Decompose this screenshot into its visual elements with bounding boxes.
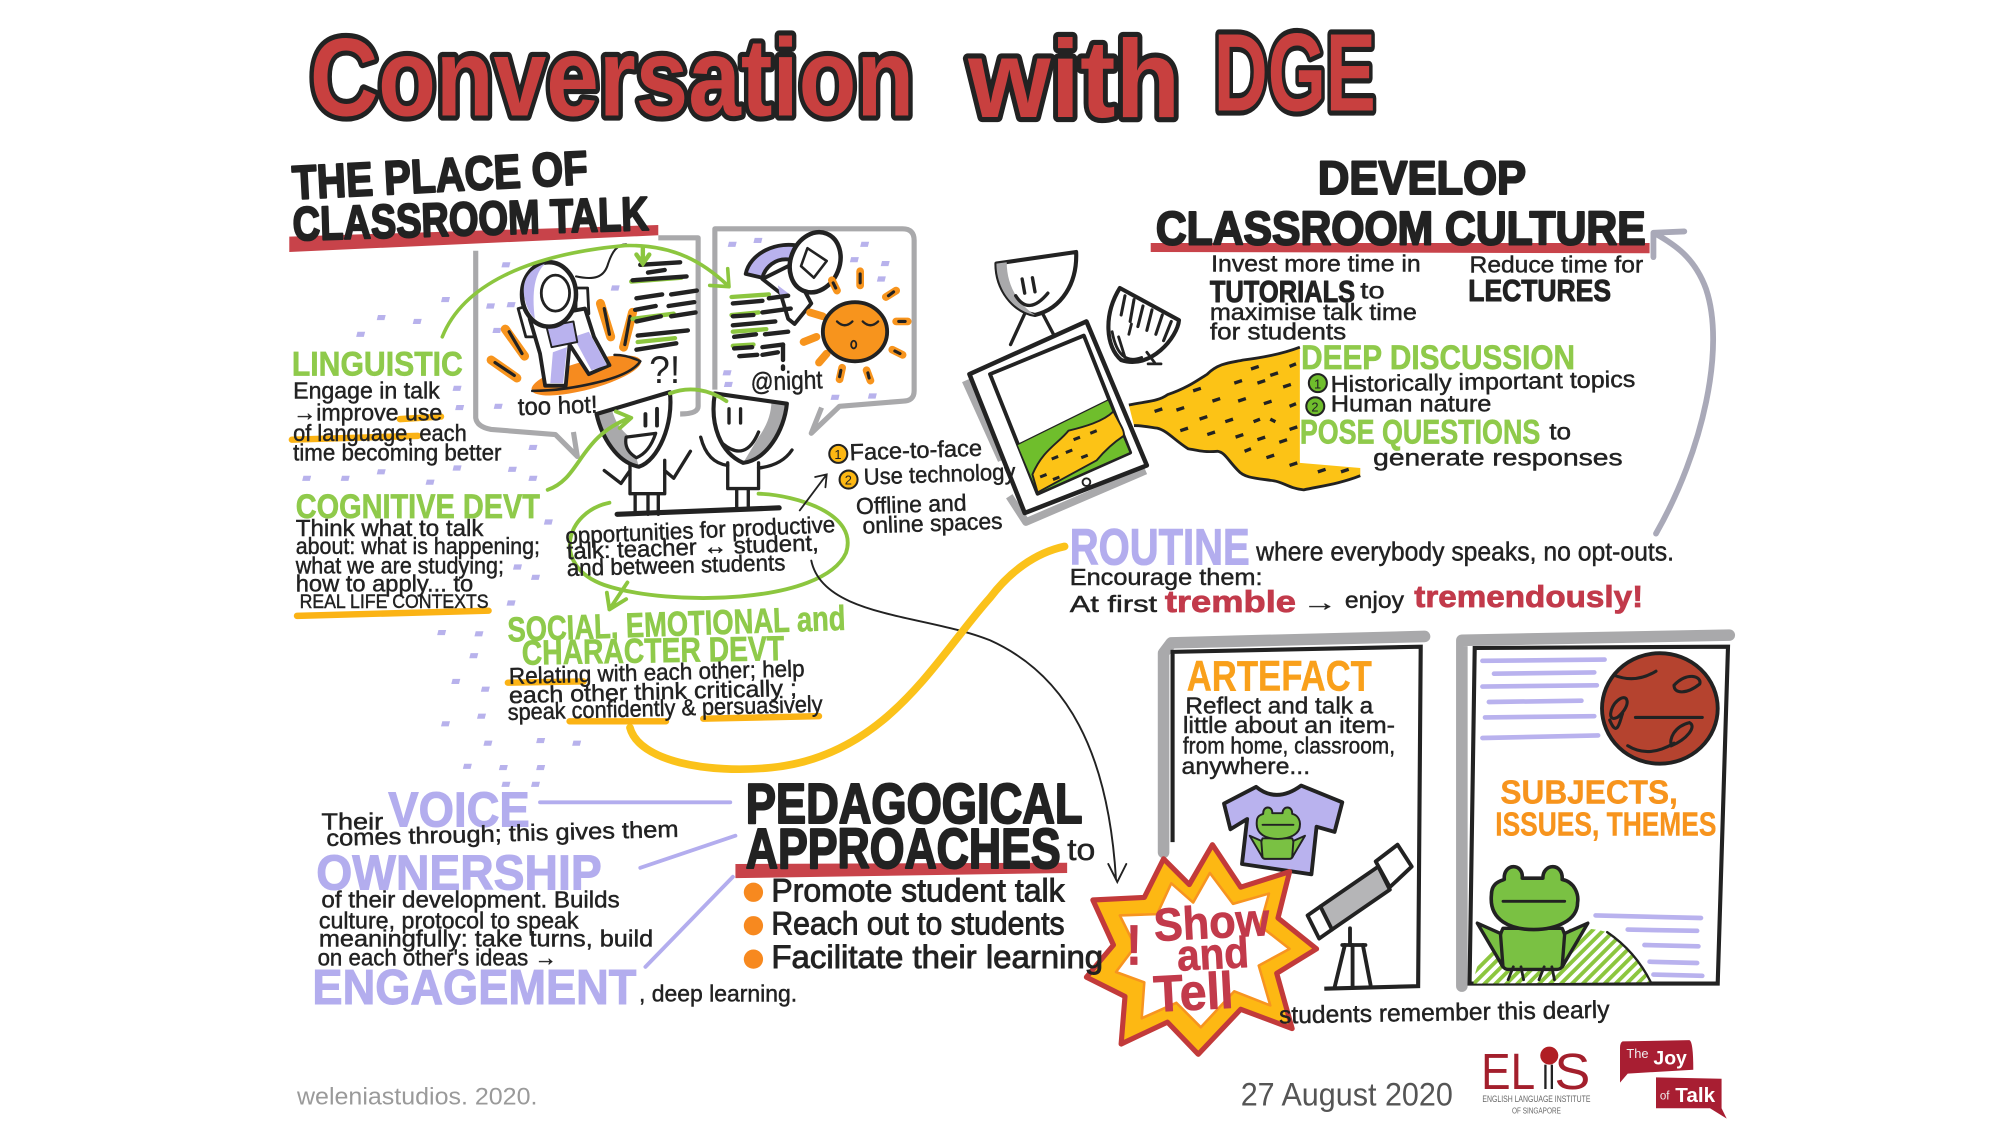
block: social emotional character [507,600,846,725]
block: voice ownership engagement [312,784,797,1015]
text: opportunities for productive talk: and between students [566,549,786,581]
block: linguistic: LINGUISTIC [292,345,463,383]
speech bubble: too hot [476,238,698,456]
curve: yellow link to routine [630,546,1065,769]
logo: ELIS: OF SINGAPORE [1512,1105,1561,1115]
panel: artefact: anywhere... [1182,753,1310,779]
block: routine: → [1302,590,1337,616]
panel: subjects issues themes: ISSUES, THEMES [1495,807,1716,844]
block: deep discussion: to [1549,419,1571,445]
caption: students remember: students remember this dearly [1279,997,1611,1029]
icon: planet [1602,653,1718,764]
block: voice ownership engagement: on each other's ideas → [318,945,557,971]
speech bubble: at night [715,229,914,433]
list: face to face and technology: 2 [845,473,852,488]
figure: student behind tablet [996,252,1179,364]
block: tutorials: Invest more time in [1211,250,1421,276]
heading: develop classroom culture: CLASSROOM CULTURE [1156,202,1646,255]
text: opportunities for productive talk [565,511,836,581]
list: pedagogical aims [744,872,1103,975]
text lines in bubble two [732,294,791,369]
list: face to face and technology: Face-to-face [849,435,982,465]
logo: the joy of talk: of [1660,1090,1670,1102]
block: lectures [1468,252,1643,308]
logo: ELIS: ENGLISH LANGUAGE INSTITUTE [1482,1094,1590,1104]
curve: thin arrow to show and tell [811,561,1126,882]
footer credit: weleniastudios. 2020. [296,1083,537,1110]
arrow: routine back to classroom culture [1653,231,1713,534]
icon: starburst show and tell: Tell [1152,961,1235,1023]
block: voice ownership engagement: Their [321,808,383,834]
connector lines to pedagogical approaches [540,802,735,967]
label: too hot: too hot! [517,392,598,421]
logo: the joy of talk: The [1626,1046,1649,1061]
list: face to face and technology [829,435,1016,539]
block: cognitive development [295,488,540,616]
block: social emotional character: CHARACTER DEVT [521,630,784,673]
block: cognitive development: REAL LIFE CONTEXTS [300,592,489,613]
green arrows and ellipse [548,389,848,609]
icon: starburst show and tell: and [1176,928,1250,981]
logo: ELIS [1481,1042,1590,1115]
block: deep discussion: POSE QUESTIONS [1300,414,1540,452]
yellow flood of discussion [1129,347,1360,490]
heading: develop classroom culture: DEVELOP [1318,152,1526,205]
panel: artefact: from home, classroom, [1183,732,1395,758]
block: voice ownership engagement: OWNERSHIP [316,847,602,901]
block: routine: tremble [1165,584,1296,619]
block: routine: tremendously! [1414,579,1643,614]
heading: pedagogical approaches: APPROACHES [746,817,1061,880]
icon: t-shirt with frog [1224,786,1342,874]
block: routine: where everybody speaks, no opt-outs. [1255,539,1674,567]
panel: artefact: ARTEFACT [1187,652,1372,699]
heading: the place of classroom talk: THE PLACE OF [291,142,589,210]
icon: starburst show and tell: ! [1126,913,1142,976]
icon: sun [804,271,908,381]
block: tutorials: TUTORIALS [1210,274,1355,309]
icon: tablet with river [966,321,1147,522]
logo: ELIS: S [1554,1042,1590,1100]
panel: artefact [1164,636,1425,989]
block: deep discussion: Historically important topics [1330,366,1635,397]
text lines in bubble one [631,248,697,350]
block: routine [1070,517,1674,619]
list: face to face and technology: 1 [834,447,842,462]
logo: the joy of talk [1620,1040,1727,1119]
text: opportunities for productive talk: opportunities for productive [565,511,836,549]
label: ?!: ?! [649,349,680,392]
block: deep discussion [1300,339,1635,470]
heading: develop classroom culture [1151,152,1650,255]
list: pedagogical aims: Facilitate their learning [771,939,1103,975]
footer date: 27 August 2020 [1241,1077,1453,1113]
block: deep discussion: 1 [1314,376,1321,391]
green arc arrow between bubbles [442,246,729,337]
block: voice ownership engagement: ENGAGEMENT [312,961,637,1015]
icon: telescope [1308,845,1412,987]
title: DGE [1214,12,1376,135]
icon: sleeping astronaut at night [746,225,849,324]
icon: starburst show and tell [1086,845,1317,1054]
logo: ELIS: EL [1481,1042,1535,1100]
block: linguistic [292,345,502,465]
title: Conversation [310,17,914,140]
block: deep discussion: 2 [1311,399,1319,414]
block: cognitive development: what we are studying; [295,552,504,578]
block: routine: enjoy [1345,587,1404,613]
block: social emotional character: each other think critically ; [509,675,797,708]
block: cognitive development: COGNITIVE DEVT [296,488,540,526]
title [310,12,1376,141]
block: voice ownership engagement: meaningfully: take turns, build [319,925,653,951]
block: social emotional character: speak confidently & persuasively [507,691,823,725]
block: cognitive development: Think what to talk [296,515,484,541]
label: at night: @night [750,366,823,397]
block: social emotional character: Relating with each other; help [509,655,805,689]
icon: frog on lily hill [1473,867,1651,984]
heading: pedagogical approaches [735,772,1095,880]
panel: artefact: Reflect and talk a [1185,693,1373,719]
block: deep discussion: DEEP DISCUSSION [1301,339,1575,377]
block: routine: Encourage them: [1070,564,1263,590]
logo: the joy of talk: Talk [1675,1084,1716,1107]
list: face to face and technology: Offline and [856,489,967,519]
panel: subjects issues themes: SUBJECTS, [1500,775,1678,812]
list: face to face and technology: Use technology [863,458,1016,490]
block: tutorials: maximise talk time [1210,299,1417,325]
text: opportunities for productive talk: talk: teacher ↔ student, [566,530,819,564]
block: lectures: LECTURES [1468,273,1611,308]
block: cognitive development: how to apply... to [296,570,473,596]
figure: two talking students [597,392,792,514]
block: linguistic: Engage in talk [293,378,440,404]
block: routine: At first [1070,591,1158,617]
list: pedagogical aims: Reach out to students [771,906,1065,942]
block: voice ownership engagement: culture, protocol to speak [319,907,579,933]
panel: subjects issues themes [1462,635,1729,986]
list: pedagogical aims: Promote student talk [771,872,1065,908]
title: with [967,18,1180,141]
list: face to face and technology: online spaces [862,508,1003,539]
block: linguistic: of language, each [293,420,467,446]
icon: astronaut on hot planet [491,244,645,404]
panel: artefact: little about an item- [1183,712,1395,738]
block: tutorials: for students [1210,318,1346,344]
heading: the place of classroom talk [289,142,658,252]
block: linguistic: time becoming better [293,439,502,465]
block: tutorials: to [1360,277,1385,303]
decorative purple dots [302,238,890,787]
block: voice ownership engagement: comes through; this gives them [326,816,679,851]
block: voice ownership engagement: , deep learning. [639,981,797,1007]
block: cognitive development: about: what is happening; [296,533,540,559]
heading: the place of classroom talk: CLASSROOM TALK [292,188,649,251]
block: deep discussion: generate responses [1373,444,1623,470]
block: voice ownership engagement: VOICE [388,784,530,838]
logo: the joy of talk: Joy [1653,1049,1687,1070]
thin arrow to spaces [800,474,827,510]
heading: pedagogical approaches: PEDAGOGICAL [746,772,1083,835]
block: lectures: Reduce time for [1470,252,1643,278]
block: voice ownership engagement: of their development. Builds [321,887,620,913]
block: linguistic: →improve use [293,399,442,425]
icon: starburst show and tell: Show [1152,893,1272,951]
heading: pedagogical approaches: to [1067,832,1095,867]
block: routine: ROUTINE [1070,517,1250,575]
block: deep discussion: Human nature [1331,390,1491,416]
block: tutorials [1210,250,1421,344]
block: social emotional character: SOCIAL, EMOTIONAL and [507,600,846,650]
